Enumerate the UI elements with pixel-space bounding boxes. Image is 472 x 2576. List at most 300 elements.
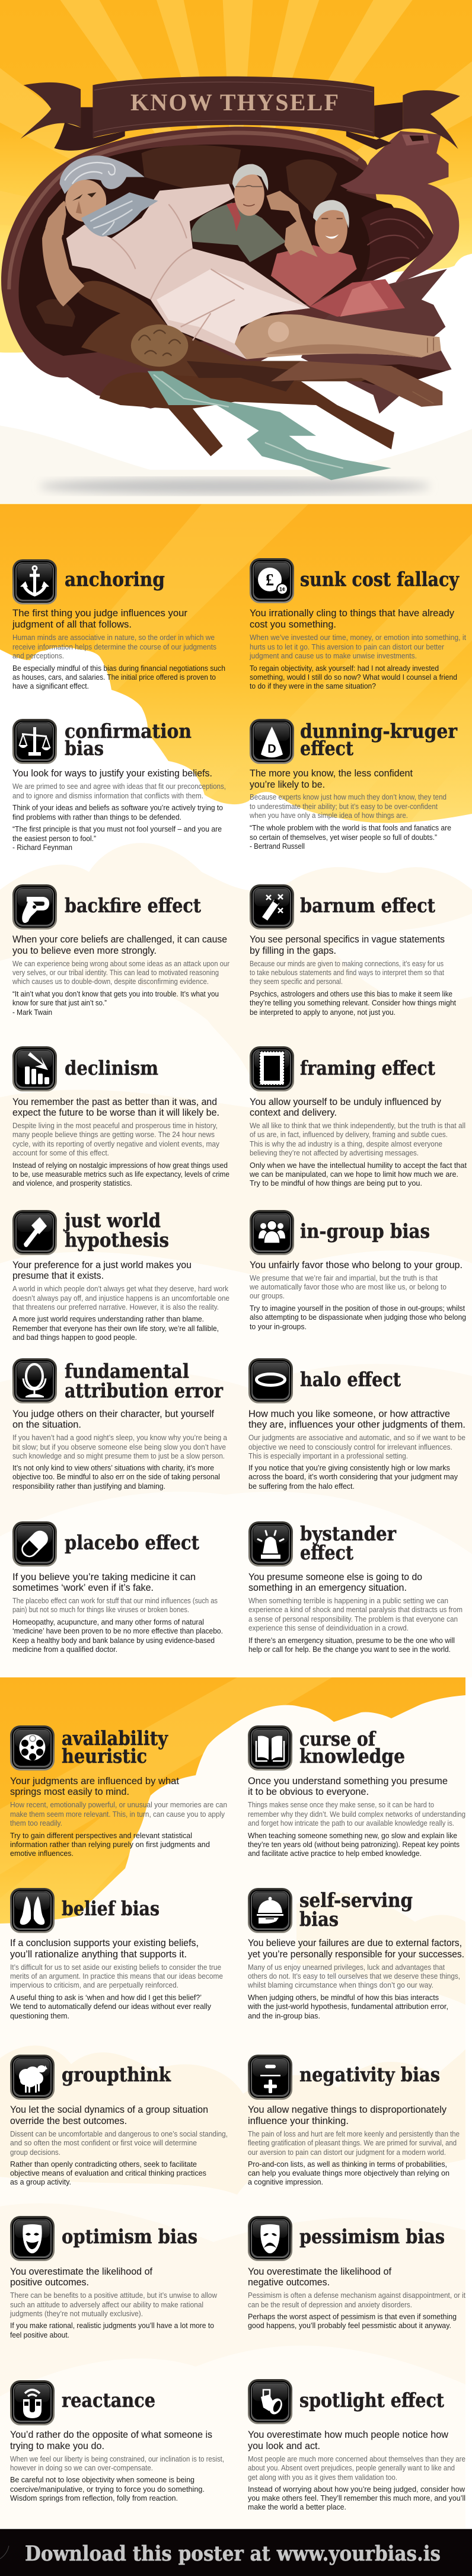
advice: coercive/manipulative, or trying to force you do something. <box>10 2485 205 2494</box>
statement: You overestimate the likelihood of <box>248 2266 391 2277</box>
explanation: objective we need to consciously control for irrelevant influences. <box>248 1443 452 1451</box>
panel: sunk cost fallacy <box>249 558 467 690</box>
advice: Psychics, astrologers and others use this bias to make it seem like <box>250 990 452 998</box>
statement: you’ll rationalize anything that supports it. <box>10 1949 187 1960</box>
statement: If you believe you’re taking medicine it can <box>12 1572 196 1582</box>
statement: You look for ways to justify your existing beliefs. <box>12 768 212 779</box>
advice <box>10 2476 205 2502</box>
advice: Be especially mindful of this bias during financial negotiations such <box>12 664 225 673</box>
ragged cloak, lower right <box>301 269 452 413</box>
advice: with the just-world hypothesis, fundamental attribution error, <box>247 2002 448 2011</box>
elder's hand at temple <box>45 201 67 238</box>
statement: You presume someone else is going to do <box>248 1572 422 1582</box>
explanation <box>12 633 216 660</box>
advice <box>248 1636 455 1654</box>
heading: bystander effect: effect <box>300 1541 354 1564</box>
statement: you look and act. <box>248 2441 320 2451</box>
explanation: and perceptions. <box>12 652 64 660</box>
heading: declinism: declinism <box>65 1056 158 1080</box>
advice <box>248 2313 457 2330</box>
background: lower section <box>0 1677 472 2529</box>
panel: belief bias <box>10 1888 223 2020</box>
heading: placebo effect: placebo effect <box>65 1531 200 1554</box>
explanation <box>248 2130 460 2157</box>
icon: scales <box>12 719 57 764</box>
advice: Remember that everyone has their own life story, we’re all fallible, <box>12 1324 219 1333</box>
panel: framing effect <box>249 1046 467 1187</box>
explanation <box>249 633 467 660</box>
panel: placebo effect <box>12 1521 223 1654</box>
statement: trying to make you do. <box>10 2441 104 2451</box>
icon: sheep <box>10 2055 55 2100</box>
heading: bystander effect: bystander <box>300 1522 397 1545</box>
explanation <box>12 782 226 800</box>
advice <box>250 664 457 690</box>
heading: dunning-kruger effect <box>300 719 458 760</box>
icon: happy mask <box>10 2216 55 2261</box>
advice and quote: the easiest person to fool.” <box>12 835 96 843</box>
left arm of the elder <box>42 201 84 307</box>
icon: sad mask <box>248 2216 292 2261</box>
explanation: There can be benefits to a positive attitude, but it’s unwise to allow <box>10 2291 218 2300</box>
man in green shirt <box>191 203 286 262</box>
advice <box>12 664 225 690</box>
panel: optimism bias <box>9 2216 218 2339</box>
statement <box>10 1938 199 1960</box>
advice <box>250 990 457 1017</box>
heading: just world hypothesis <box>63 1209 169 1252</box>
advice: Be careful not to lose objectivity when someone is being <box>10 2476 194 2484</box>
heading: negativity bias: negativity bias <box>299 2063 440 2086</box>
advice: responsibility rather than justifying and blaming. <box>12 1482 165 1491</box>
elder's hair <box>60 155 145 194</box>
panel: halo effect <box>248 1358 465 1491</box>
statement: You let the social dynamics of a group situation <box>10 2104 208 2115</box>
panel: barnum effect <box>250 884 457 1017</box>
explanation <box>12 960 229 986</box>
explanation: experience this sense of deindividuation in a crowd. <box>248 1624 409 1632</box>
advice: To regain objectivity, ask yourself: had I not already invested <box>250 664 439 673</box>
statement: it to be obvious to everyone. <box>248 1787 369 1797</box>
explanation: a sense of personal responsibility. The problem is that everyone can <box>248 1615 458 1623</box>
explanation: and so often the most confident or first voice will determine <box>10 2139 197 2147</box>
statement <box>10 2266 152 2288</box>
statement: Your preference for a just world makes you <box>12 1260 192 1271</box>
explanation: when you have only a simple idea of how things are. <box>249 811 408 820</box>
explanation <box>248 1801 465 1827</box>
advice <box>247 1994 448 2020</box>
icon: postage stamp frame <box>250 1046 294 1091</box>
advice: they’re ten years old (without being patronizing). Repeat key points <box>248 1841 460 1849</box>
statement: You’d rather do the opposite of what someone is <box>10 2429 212 2440</box>
explanation: Many of us enjoy unearned privileges, luck and advantages that <box>248 1963 445 1972</box>
advice and quote <box>12 804 223 852</box>
explanation: We all like to think that we think independently, but the truth is that all <box>250 1122 465 1130</box>
explanation <box>249 793 447 820</box>
advice <box>12 1464 220 1491</box>
advice <box>248 2160 449 2186</box>
heading: curse of knowledge <box>299 1727 405 1768</box>
advice: When judging others, be mindful of how this bias interacts <box>248 1994 439 2002</box>
explanation: and forget how intricate the path to our available knowledge really is. <box>248 1819 454 1827</box>
advice: It’s not only kind to view others’ situations with charity, it’s more <box>12 1464 214 1472</box>
advice: to be, use measurable metrics such as life expectancy, levels of crime <box>12 1170 229 1179</box>
heading: spotlight effect: spotlight effect <box>299 2389 445 2412</box>
explanation <box>10 1801 227 1827</box>
raised arm and hand <box>266 190 318 257</box>
heading: in-group bias: in-group bias <box>300 1219 430 1243</box>
statement: Your judgments are influenced by what <box>10 1776 179 1787</box>
advice: Instead of relying on nostalgic impressions of how great things used <box>12 1161 228 1170</box>
advice: Rather than openly contradicting others, seek to facilitate <box>10 2160 197 2169</box>
statement <box>250 1097 442 1118</box>
quote <box>250 824 451 851</box>
panel: anchoring <box>12 559 225 690</box>
advice: A useful thing to ask is ‘when and how did I get this belief?’ <box>10 1994 202 2002</box>
heading: backfire effect: backfire effect <box>65 894 202 917</box>
explanation: make them seem more relevant. This, in turn, can cause you to apply <box>10 1810 225 1819</box>
explanation: Things makes sense once they make sense, so it can be hard to <box>248 1801 434 1809</box>
statement <box>250 934 445 956</box>
explanation <box>247 1963 460 1989</box>
explanation: judgment and cause us to make unwise investments. <box>249 652 417 660</box>
statement <box>248 2429 448 2451</box>
panel: groupthink <box>10 2055 228 2186</box>
explanation <box>12 1597 218 1614</box>
heading: bystander effect <box>300 1522 397 1564</box>
statement <box>12 934 227 956</box>
explanation <box>10 1963 223 1989</box>
advice <box>10 2160 206 2186</box>
explanation <box>250 960 444 986</box>
heading: anchoring: anchoring <box>65 568 165 591</box>
statement: You see personal specifics in vague statements <box>250 934 445 945</box>
heading: optimism bias: optimism bias <box>62 2225 197 2248</box>
advice: they’re telling you something relevant. Consider how things might <box>250 999 457 1007</box>
advice: we can be manipulated, can we hope to limit how much we are. <box>249 1170 458 1179</box>
explanation: to underestimate their ability; but it’s easy to be over-confident <box>250 803 438 811</box>
heading: availability heuristic: heuristic <box>62 1744 147 1768</box>
statement: springs most easily to mind. <box>10 1787 129 1797</box>
explanation <box>12 1285 229 1311</box>
quote: - Bertrand Russell <box>250 842 305 851</box>
advice <box>10 2322 214 2339</box>
explanation <box>248 1434 465 1460</box>
quote: so certain of themselves, yet wiser people so full of doubts.” <box>250 833 437 842</box>
panel: fundamental attribution error <box>12 1358 227 1491</box>
advice and quote: Think of your ideas and beliefs as software you’re actively trying to <box>12 804 223 812</box>
advice: We tend to automatically defend our ideas without ever really <box>10 2002 212 2011</box>
explanation: pain) but not so much for things like viruses or broken bones. <box>12 1606 189 1614</box>
statement: negative outcomes. <box>248 2277 330 2288</box>
icon: coin: 1¢ <box>279 586 285 592</box>
icon: open book <box>248 1725 292 1771</box>
banner left tail <box>21 82 81 139</box>
explanation <box>10 2130 228 2157</box>
heading: just world hypothesis: hypothesis <box>65 1228 169 1252</box>
explanation <box>248 2455 465 2482</box>
statement: You overestimate the likelihood of <box>10 2266 152 2277</box>
hero illustration <box>0 0 472 504</box>
explanation <box>250 1122 465 1157</box>
statement: When your core beliefs are challenged, it can cause <box>12 934 227 945</box>
explanation: they seem specific and personal. <box>250 977 343 986</box>
statement: you’re likely to be. <box>250 779 325 790</box>
elder's face <box>65 180 106 222</box>
statement: cost you something. <box>250 619 336 630</box>
heading: dunning-kruger effect: dunning-kruger <box>300 719 458 743</box>
statement <box>248 2266 391 2288</box>
statement <box>250 768 413 790</box>
cloak shell <box>1 127 379 409</box>
icon: pill <box>12 1521 57 1566</box>
heading: belief bias: belief bias <box>62 1897 160 1920</box>
advice: and the in-group bias. <box>248 2012 320 2020</box>
explanation: very selves, or our tribal identity. This can lead to motivated reasoning <box>12 969 219 977</box>
background: upper section <box>0 504 472 1677</box>
footer banner <box>0 2529 472 2576</box>
statement <box>12 1097 219 1118</box>
statement <box>248 1409 465 1430</box>
advice: you make others feel. They’ll remember this much more, and you’ll <box>248 2494 465 2502</box>
statement <box>248 1938 464 1960</box>
advice <box>249 1161 467 1187</box>
panel: just world hypothesis <box>12 1209 229 1342</box>
quote <box>12 990 219 1017</box>
panel: confirmation bias <box>12 719 226 852</box>
quote: know for sure that just ain’t so.” <box>12 999 107 1007</box>
advice: across the board, it’s worth considering that your judgment may <box>248 1473 458 1481</box>
advice <box>10 1832 210 1858</box>
advice: objective means of evaluation and critical thinking practices <box>10 2169 206 2177</box>
advice: A more just world requires understanding rather than blame. <box>12 1315 204 1323</box>
statement <box>10 2429 212 2451</box>
heading: fundamental attribution error: fundamental <box>65 1359 189 1383</box>
green scarf <box>148 371 391 480</box>
statement: sometimes ‘work’ even if it’s fake. <box>12 1582 154 1593</box>
statement: How much you like someone, or how attractive <box>248 1409 450 1419</box>
advice <box>12 1161 229 1187</box>
panel: negativity bias <box>248 2055 460 2186</box>
icon: halo <box>248 1358 293 1403</box>
advice: also attempting to be dispassionate when judging those who belong <box>250 1313 466 1322</box>
explanation: judgments (they’re not mutually exclusive). <box>9 2310 143 2318</box>
panel: curse of knowledge <box>248 1725 465 1858</box>
advice: make the world a better place. <box>248 2503 346 2511</box>
heading: fundamental attribution error: attribution error <box>65 1379 224 1402</box>
explanation: such knowledge and so might presume them to just be a slow person. <box>12 1452 225 1460</box>
explanation: about you. Absent overt prejudices, people generally want to like and <box>248 2464 455 2472</box>
quote: “It ain’t what you don’t know that gets you into trouble. It’s what you <box>12 990 219 998</box>
explanation <box>12 1434 227 1460</box>
panel: declinism <box>12 1046 229 1187</box>
icon: magic wand <box>250 884 294 929</box>
explanation: Human minds are associative in nature, so the order in which we <box>12 633 215 642</box>
heading: availability heuristic <box>62 1727 168 1768</box>
explanation: If you haven’t had a good night’s sleep, you know why you’re being a <box>12 1434 227 1442</box>
explanation: we automatically favor those who are most like us, or belong to <box>249 1283 447 1291</box>
explanation: to take nebulous statements and find ways to interpret them so that <box>250 969 444 977</box>
statement: expect the future to be worse than it will likely be. <box>12 1107 219 1118</box>
advice: have a significant effect. <box>12 682 89 690</box>
explanation: Our judgments are associative and automatic, and so if we want to be <box>248 1434 465 1442</box>
advice: If you make rational, realistic judgments you’ll have a lot more to <box>10 2322 214 2330</box>
explanation: our aversion to pain can distort our judgment for a modern world. <box>248 2148 446 2157</box>
heading: reactance: reactance <box>62 2389 155 2412</box>
panel: self-serving bias <box>247 1888 464 2020</box>
quote: - Mark Twain <box>12 1008 52 1017</box>
advice <box>12 1315 219 1342</box>
heading: dunning-kruger effect: effect <box>300 737 354 760</box>
statement: judgment of all that follows. <box>12 619 132 630</box>
heading: barnum effect: barnum effect <box>300 894 436 917</box>
explanation <box>249 1274 447 1300</box>
explanation: of us are, in fact, influenced by delivery, framing and subtle cues. <box>250 1131 448 1139</box>
statement: The more you know, the less confident <box>250 768 413 779</box>
statement <box>10 1776 179 1797</box>
statement <box>12 1409 214 1430</box>
advice: Wisdom springs from reflection, folly from reaction. <box>10 2494 178 2502</box>
explanation: which causes us to double-down, despite disconfirming evidence. <box>12 977 209 986</box>
panel: availability heuristic <box>10 1725 227 1858</box>
advice: If you notice that you’re giving consistently high or low marks <box>248 1464 450 1472</box>
heading: curse of knowledge: knowledge <box>299 1744 405 1768</box>
explanation: many people believe things are getting worse. The 24 hour news <box>12 1131 215 1139</box>
statement: You remember the past as better than it was, and <box>12 1097 217 1107</box>
explanation <box>12 1122 220 1157</box>
heading: groupthink: groupthink <box>62 2063 171 2086</box>
icon: siren <box>248 1521 293 1566</box>
advice: can help you evaluate things more objectively than relying on <box>248 2169 449 2177</box>
explanation: bit slow; but if you observe someone else being slow you don’t have <box>12 1443 226 1451</box>
heading: confirmation bias: confirmation <box>65 719 192 743</box>
panel: reactance <box>10 2380 224 2502</box>
advice: and bad things happen to good people. <box>12 1333 137 1342</box>
heading: self-serving bias <box>299 1889 413 1931</box>
explanation <box>10 2455 224 2472</box>
icon: coin <box>250 558 294 603</box>
explanation: our groups. <box>250 1292 285 1300</box>
statement <box>248 1776 448 1797</box>
heading: framing effect: framing effect <box>300 1056 436 1080</box>
man in red shirt <box>271 245 357 307</box>
panel: pessimism bias <box>248 2216 465 2330</box>
advice: ‘medicine’ have been proven to be no more effective than placebo. <box>12 1627 223 1635</box>
advice: information rather than relying purely on first judgments and <box>10 1841 210 1849</box>
advice: objective too. Be mindful to also err on the side of taking personal <box>12 1473 220 1481</box>
statement: You overestimate how much people notice how <box>248 2429 448 2440</box>
icon: dunce cap <box>250 719 294 764</box>
icon: magnet with waves <box>10 2380 55 2425</box>
advice: and violence, and prosperity statistics. <box>12 1179 132 1187</box>
explanation: Because our minds are given to making connections, it’s easy for us <box>250 960 444 968</box>
statement <box>12 1572 196 1593</box>
explanation: Because experts know just how much they don’t know, they tend <box>250 793 447 801</box>
title: Know Thyself: KNOW THYSELF <box>130 89 339 116</box>
dark interior <box>18 145 416 356</box>
icon: minus over plus <box>248 2055 292 2100</box>
advice: When teaching someone something new, go slow and explain like <box>248 1832 457 1840</box>
explanation: How recent, emotionally powerful, or unusual your memories are can <box>10 1801 227 1809</box>
advice: as houses, cars, and salaries. The initial price offered is proven to <box>12 673 216 682</box>
explanation: The placebo effect can work for stuff that our mind influences (such as <box>12 1597 218 1605</box>
statement: You allow negative things to disproportionately <box>248 2104 447 2115</box>
elder's beard <box>81 192 158 237</box>
statement: influence your thinking. <box>248 2116 349 2126</box>
faint figures in the shadows <box>36 145 337 327</box>
advice: Perhaps the worst aspect of pessimism is that even if something <box>248 2313 457 2321</box>
explanation: doesn’t always pay off, and injustice happens is an uncomfortable one <box>12 1294 229 1303</box>
icon: group of people <box>250 1210 294 1255</box>
banner centre <box>93 77 374 138</box>
explanation <box>9 2291 218 2318</box>
advice <box>248 1464 458 1491</box>
statement: by filling in the gaps. <box>250 945 336 956</box>
statement: something in an emergency situation. <box>248 1582 407 1593</box>
panel: backfire effect <box>12 884 229 1017</box>
statement: The first thing you judge influences your <box>12 608 188 619</box>
advice: Pro-and-con lists, as well as thinking in terms of probabilities, <box>248 2160 447 2169</box>
hero sky with sun rays <box>0 0 472 504</box>
explanation: believing they’re not affected by advertising messages. <box>250 1149 419 1157</box>
explanation: Dissent can be uncomfortable and dangerous to one’s social standing, <box>10 2130 228 2138</box>
advice: help or call for help. Be the change you want to see in the world. <box>248 1645 451 1654</box>
robe <box>66 184 310 359</box>
advice: to do if they were in the same situation? <box>250 682 376 690</box>
advice: Instead of worrying about how you’re being judged, consider how <box>248 2485 465 2494</box>
quote: “The whole problem with the world is that fools and fanatics are <box>250 824 451 832</box>
explanation <box>248 2291 465 2309</box>
advice: good happens, you’ll probably feel pessmistic about it anyway. <box>248 2322 451 2330</box>
statement: yet you’re personally responsible for your successes. <box>248 1949 464 1960</box>
statement: presume that it exists. <box>12 1271 104 1281</box>
statement <box>12 1260 192 1281</box>
advice: and facilitate active practice to help embed knowledge. <box>248 1849 422 1858</box>
advice and quote: - Richard Feynman <box>12 843 72 852</box>
heading: confirmation bias <box>65 719 192 760</box>
statement: override the best outcomes. <box>10 2116 127 2126</box>
advice: Only when we have the intellectual humility to accept the fact that <box>250 1161 467 1170</box>
explanation: Despite living in the most peaceful and prosperous time in history, <box>12 1122 218 1130</box>
advice: If there’s an emergency situation, presume to be the one who will <box>248 1636 455 1645</box>
explanation: This is especially important in a professional setting. <box>248 1452 408 1460</box>
explanation <box>248 1597 463 1632</box>
icon: spotlight <box>248 2379 292 2424</box>
icon: gavel <box>12 1210 57 1255</box>
advice: as a group activity. <box>10 2178 71 2186</box>
advice: Homeopathy, acupuncture, and many other forms of natural <box>12 1618 204 1626</box>
advice: Try to be mindful of how things are being put to you. <box>250 1179 422 1187</box>
explanation: impervious to criticism, and are perpetually reinforced. <box>10 1981 178 1989</box>
icon: bent gun <box>12 884 57 929</box>
explanation: It’s difficult for us to set aside our existing beliefs to consider the true <box>10 1963 221 1972</box>
heading: self-serving bias: self-serving <box>299 1889 413 1912</box>
explanation: whilst blaming circumstance when things don’t go our way. <box>247 1981 433 1989</box>
explanation: A world in which people don’t always get what they deserve, hard work <box>12 1285 229 1293</box>
advice: feel positive about. <box>10 2331 69 2339</box>
explanation: and to ignore and dismiss information that conflicts with them. <box>12 792 203 800</box>
heading: fundamental attribution error <box>65 1359 224 1402</box>
statement <box>10 2104 208 2126</box>
statement: on the situation. <box>12 1419 81 1430</box>
icon: dunce cap: D <box>267 743 276 756</box>
statement: context and delivery. <box>250 1107 337 1118</box>
advice: be suffering from the halo effect. <box>248 1482 355 1491</box>
statement: If a conclusion supports your existing beliefs, <box>10 1938 199 1948</box>
explanation: others do not. It’s easy to tell ourselves that we deserve these things, <box>248 1972 460 1980</box>
swirl of cloak, right <box>340 131 459 284</box>
advice: questioning them. <box>10 2012 69 2020</box>
